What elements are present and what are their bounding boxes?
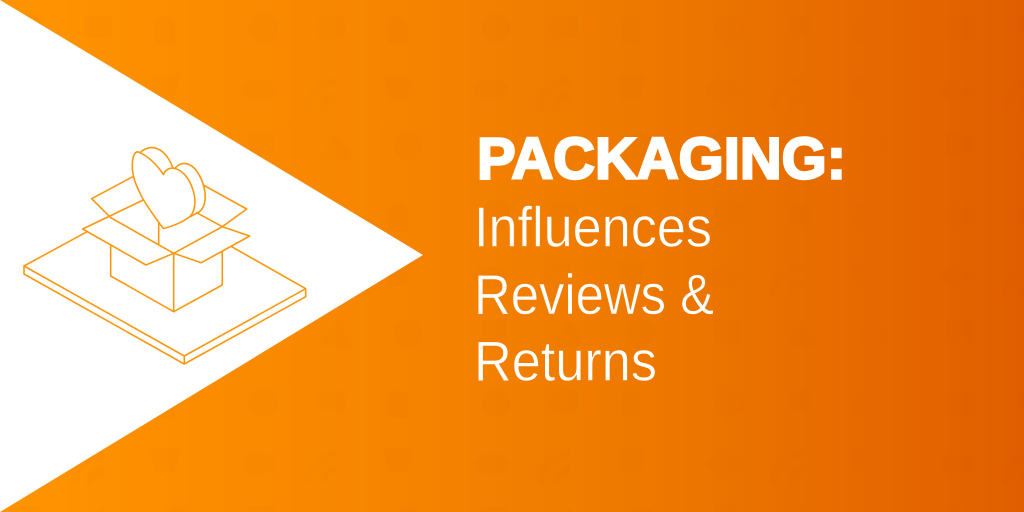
subtitle: Returns: Returns <box>474 330 657 394</box>
box body <box>111 245 222 312</box>
title: PACKAGING:: PACKAGING: <box>477 126 846 191</box>
heart <box>132 152 195 228</box>
white triangle panel <box>0 0 423 512</box>
subtitle: Reviews &: Reviews & <box>474 263 714 327</box>
platform <box>24 232 306 364</box>
icon: open box with heart on platform <box>24 148 306 364</box>
box flaps <box>83 177 250 265</box>
subtitle: Influences: Influences <box>474 196 712 260</box>
